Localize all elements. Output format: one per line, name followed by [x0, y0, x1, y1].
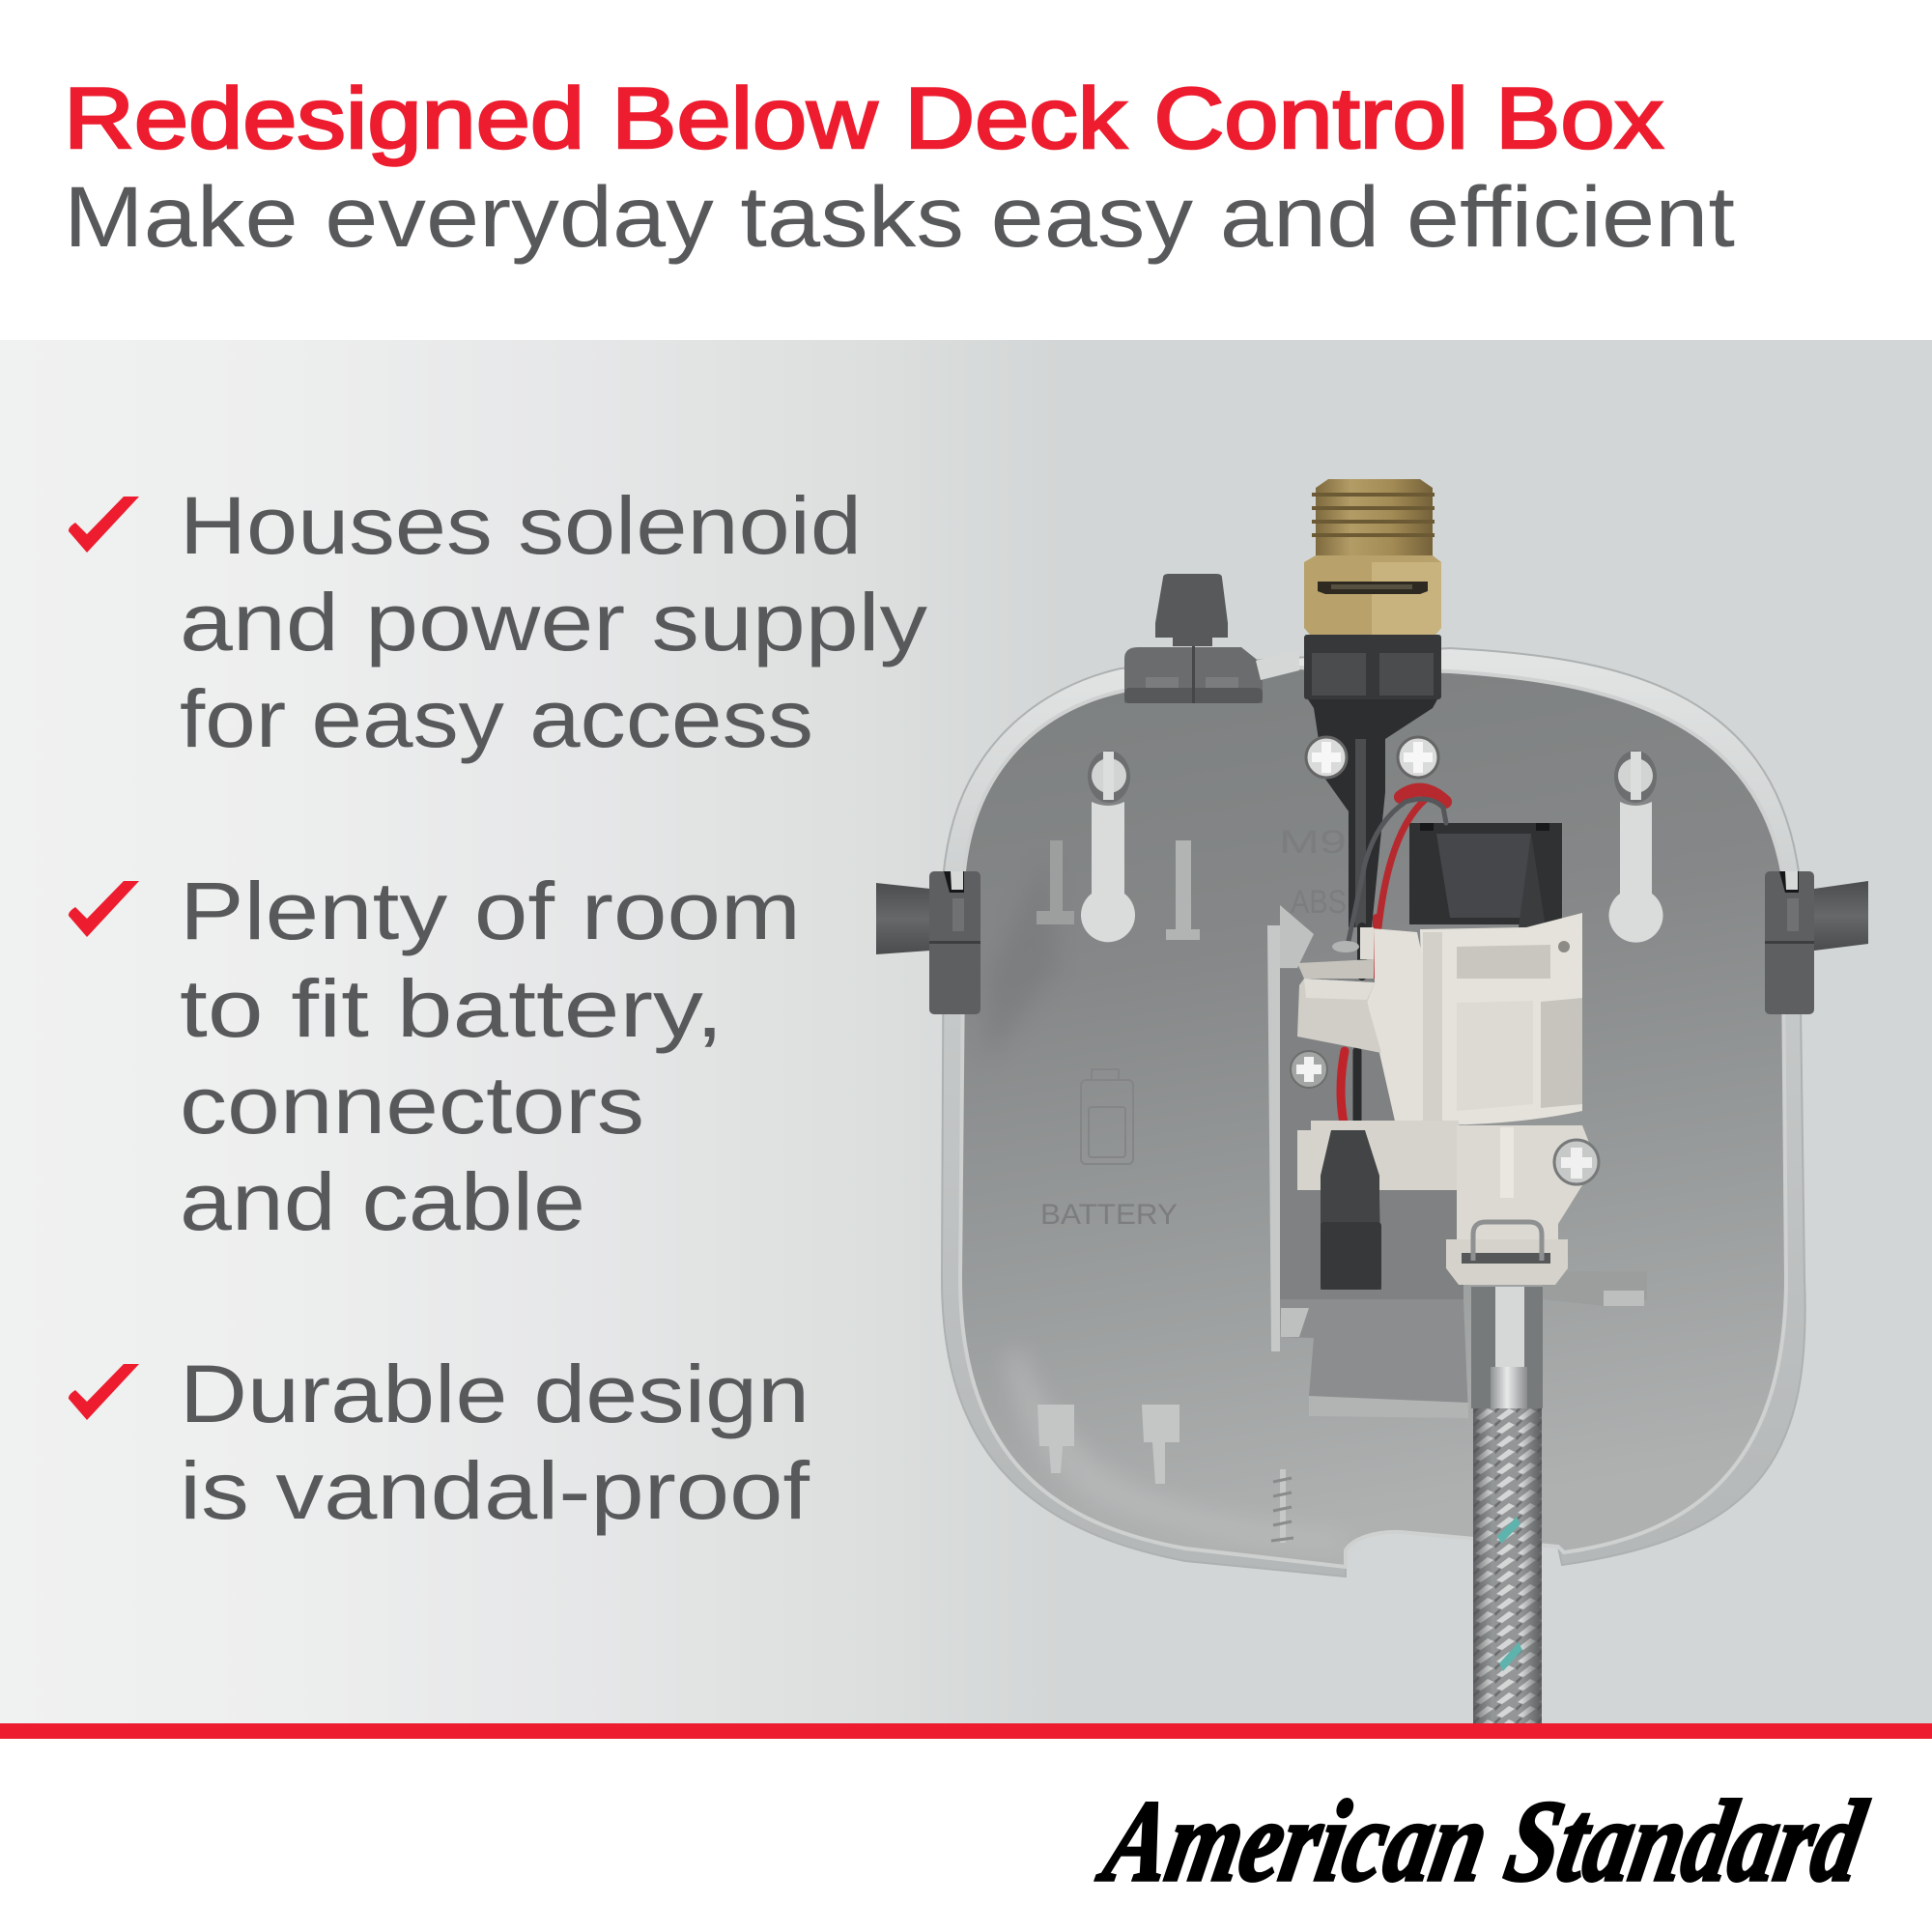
feature: durable design — [69, 1349, 810, 1536]
braided hose — [1471, 1287, 1543, 1723]
wing — [1297, 959, 1374, 979]
lower valve body — [1291, 1051, 1599, 1239]
title: Redesigned Below Deck Control Box — [64, 70, 1663, 166]
top nub and clip — [1124, 574, 1299, 703]
screws top — [1306, 737, 1438, 778]
title: Make everyday tasks easy and efficient — [64, 168, 1735, 265]
feature: plenty of room: Plenty of room — [180, 866, 801, 956]
feature: plenty of room: connectors — [180, 1060, 644, 1151]
moulded clips upper — [1037, 840, 1200, 940]
wires — [1341, 790, 1446, 1128]
keyhole slots — [1081, 751, 1663, 943]
control box illustration — [876, 479, 1868, 1723]
feature: plenty of room: and cable — [180, 1156, 585, 1247]
mounting screw bottom — [1271, 1469, 1293, 1543]
moulded embossed marks: M9 — [1279, 824, 1347, 861]
grommet right — [1765, 871, 1868, 1014]
icon: check mark — [69, 881, 139, 937]
title — [64, 70, 1735, 265]
moulded embossed marks — [1279, 824, 1347, 921]
feature: durable design: Durable design — [180, 1349, 810, 1439]
feature: houses solenoid: and power supply — [180, 577, 927, 668]
keyhole right — [1609, 751, 1663, 943]
moulded hooks lower — [1037, 1405, 1179, 1484]
keyhole left — [1081, 751, 1135, 942]
solenoid — [1409, 823, 1562, 927]
icon: check mark — [69, 497, 139, 553]
black connector — [1321, 1130, 1381, 1290]
feature: plenty of room: to fit battery, — [180, 963, 724, 1054]
battery moulded label: BATTERY — [1040, 1199, 1178, 1231]
collar and retaining clip — [1446, 1222, 1568, 1285]
cream solenoid housing — [1297, 913, 1582, 1125]
recess and plate — [1267, 905, 1647, 1418]
feature: houses solenoid — [69, 480, 927, 764]
housing shell — [942, 648, 1805, 1577]
brass inlet fitting — [1304, 479, 1441, 635]
moulded embossed marks: ABS — [1291, 884, 1347, 921]
battery moulded label — [1040, 1069, 1178, 1231]
icon: check mark — [69, 1364, 139, 1420]
feature: houses solenoid: Houses solenoid — [180, 480, 862, 571]
left column — [1360, 927, 1423, 1125]
grommet left — [876, 871, 980, 1014]
feature: durable design: is vandal-proof — [180, 1445, 810, 1536]
red divider band — [0, 1723, 1932, 1739]
background panel — [0, 340, 1932, 1724]
cup body — [1420, 913, 1582, 1125]
feature: houses solenoid: for easy access — [180, 673, 813, 764]
feature: plenty of room — [69, 866, 801, 1247]
black valve block and stem — [1304, 635, 1441, 927]
